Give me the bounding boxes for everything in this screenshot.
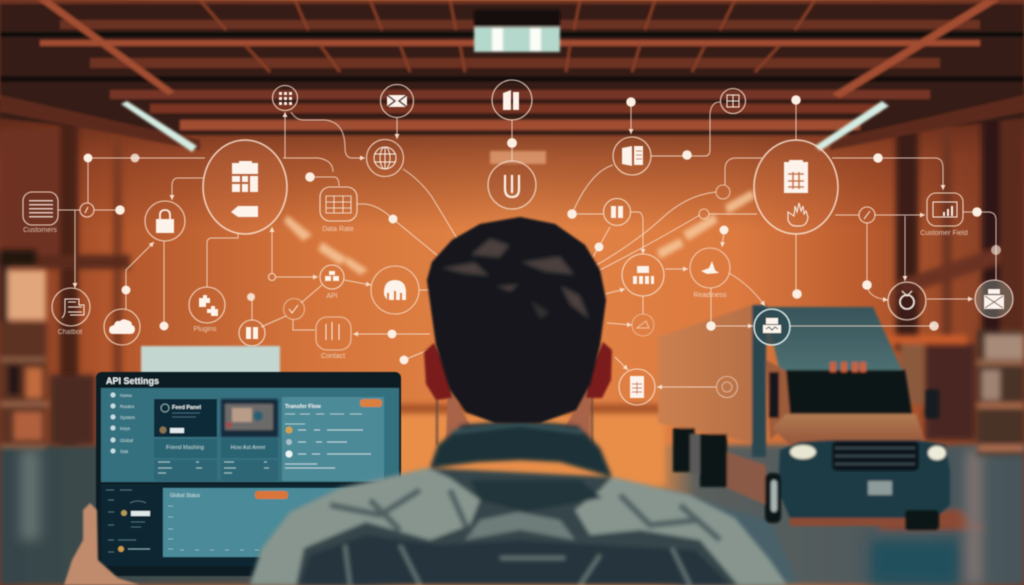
- sidebar menu: Global: [120, 438, 133, 443]
- ceiling lights: [121, 10, 889, 164]
- node: plugins puzzle: [189, 287, 225, 333]
- truck cab: [765, 307, 903, 372]
- sidebar menu: System: [120, 415, 135, 420]
- node: check: [284, 298, 304, 320]
- sidebar menu: Routes: [120, 404, 135, 409]
- node: mail: [380, 84, 414, 118]
- tablet chart panel: [163, 488, 393, 557]
- shoulder highlights: [250, 468, 787, 585]
- tablet chart panel: Global Status: [170, 493, 201, 499]
- node: cloud: [104, 309, 140, 345]
- metric cards: [154, 439, 278, 481]
- dark card: Feed Panel: [172, 405, 202, 411]
- right shelves: [885, 330, 1024, 455]
- node: globe: [366, 140, 404, 176]
- floor: [0, 404, 1024, 585]
- node: readiness: Readiness: [693, 292, 727, 299]
- side walls with pillars: [0, 90, 1024, 445]
- left shelves: [0, 250, 95, 448]
- node: plugins puzzle: Plugins: [194, 326, 217, 333]
- node: gauge: [632, 314, 654, 336]
- node: settings: [716, 376, 738, 398]
- floor reflections: [20, 450, 982, 585]
- node: package small: [720, 88, 746, 114]
- connector dots: [84, 95, 1001, 364]
- sidebar menu: [110, 392, 135, 454]
- sidebar menu: Home: [120, 393, 133, 398]
- truck cargo box: [658, 305, 752, 443]
- node: readiness: [690, 248, 730, 299]
- hub: warehouse dashboard: [203, 140, 287, 234]
- tablet dashboard: [96, 372, 401, 576]
- connector lines and arrows: [58, 100, 996, 387]
- node: boxes: [239, 320, 265, 346]
- node: data rate document: Data Rate: [322, 226, 354, 233]
- node: books: [613, 137, 651, 175]
- node: customers document: Customers: [23, 227, 57, 234]
- node: book: [604, 198, 630, 226]
- tablet lower panel: [101, 484, 399, 566]
- tablet upper screen: [101, 388, 399, 482]
- white display behind tablet: [141, 346, 280, 376]
- tablet title: API Settings: [106, 376, 159, 386]
- man seen from behind: [248, 217, 787, 585]
- right panel: Transfer Flow: [285, 404, 321, 410]
- node: small connector gauge: [80, 203, 94, 217]
- jacket: [248, 420, 787, 585]
- sidebar menu: Stat: [120, 449, 129, 454]
- hand holding tablet: [64, 503, 140, 585]
- node: centre shield: [488, 161, 536, 209]
- node: team: [622, 254, 664, 296]
- node: data rate document: [320, 187, 357, 233]
- hub: mobile app: [754, 140, 838, 234]
- node: customers document: [23, 192, 58, 234]
- right panel: [282, 397, 384, 481]
- jacket collar: [430, 420, 612, 477]
- metric cards: How Ast Areer: [231, 445, 266, 451]
- node: headphones: [371, 266, 419, 314]
- node: chatbot: Chatbot: [58, 329, 82, 336]
- node: API: API: [326, 293, 338, 300]
- node: gauge right: [859, 207, 875, 223]
- node: recycle: [888, 282, 926, 320]
- node: top centre documents: [492, 80, 532, 120]
- node: parcel: [975, 280, 1013, 318]
- neck and ears: [424, 342, 612, 445]
- node: contact: [316, 317, 351, 360]
- node: API: [320, 265, 344, 300]
- node: customer analytics monitor: Customer Field: [920, 230, 968, 237]
- truck headlights: [790, 445, 816, 459]
- node: clipboard: [619, 369, 655, 405]
- metric cards: Friend Mashing: [166, 445, 204, 451]
- jacket creases: [330, 490, 720, 540]
- node: customer analytics monitor: [920, 193, 968, 237]
- network diagram overlay: [23, 80, 1013, 405]
- image card: [221, 399, 278, 437]
- node: chatbot: [52, 288, 90, 336]
- node: truck scan: [754, 309, 790, 345]
- node: shipping grid: [272, 86, 298, 110]
- reflections of overhead lights: [284, 190, 755, 275]
- delivery truck: [658, 305, 950, 530]
- sidebar menu: Keys: [120, 426, 131, 431]
- dark card: [154, 399, 217, 437]
- ceiling trusses: [0, 0, 1024, 150]
- node: contact: Contact: [321, 353, 345, 360]
- hair: [427, 217, 606, 423]
- node: lock: [145, 201, 185, 241]
